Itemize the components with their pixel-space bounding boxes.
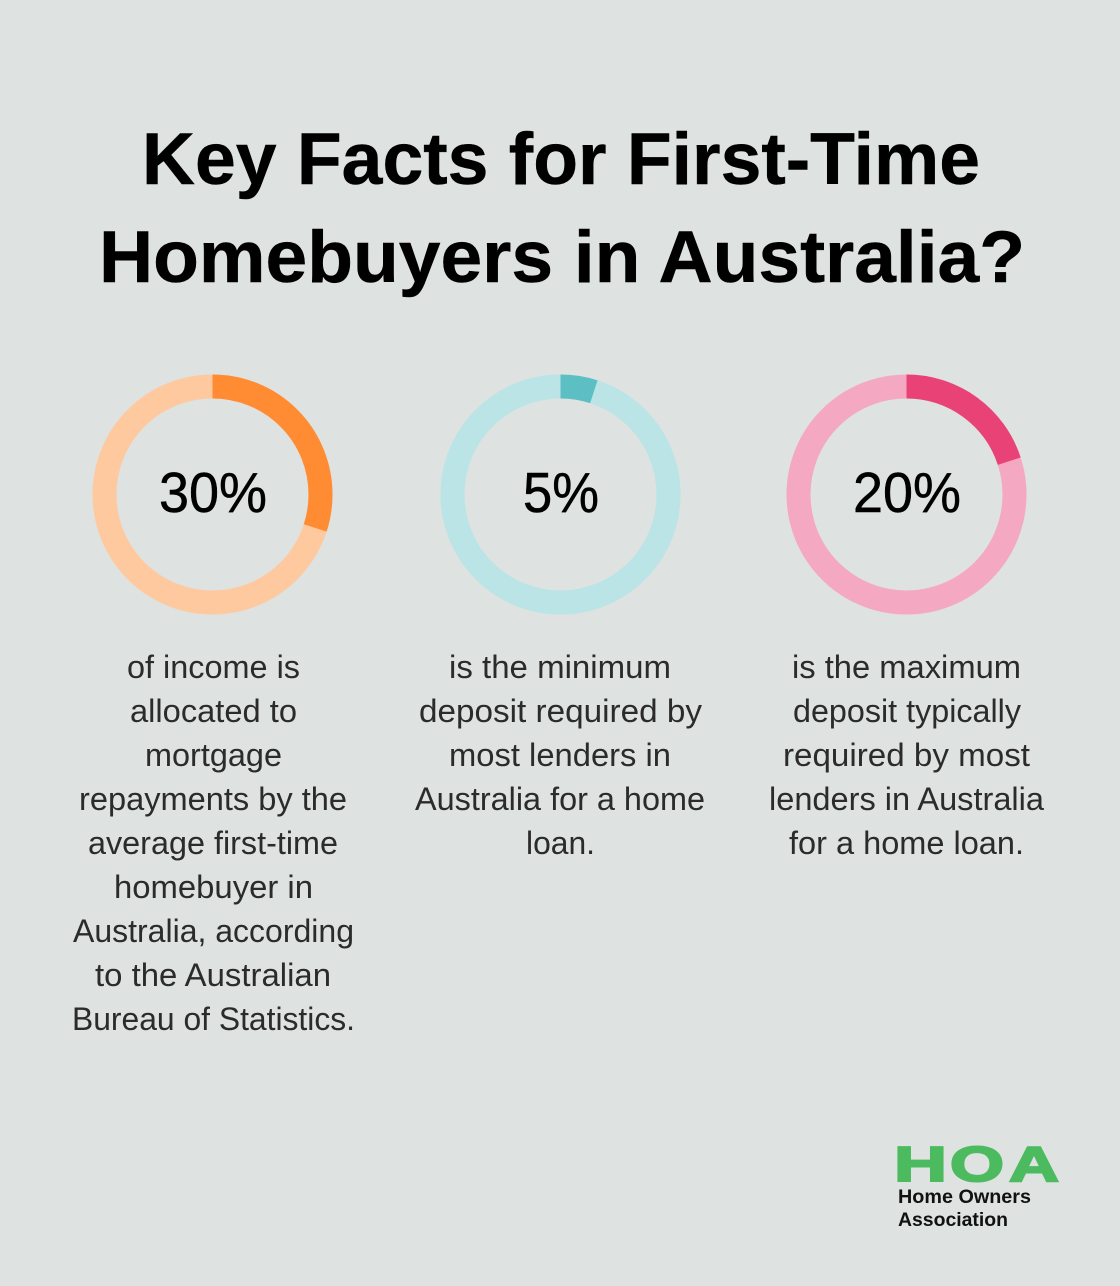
text: 5% description: Australia for a home [415, 781, 705, 817]
title: Homebuyers in Australia? [99, 217, 1025, 298]
text: 20% description: is the maximum [792, 649, 1021, 685]
title: Key Facts for First-Time [142, 119, 980, 200]
text: 5% description: loan. [526, 825, 595, 861]
text: 20% description [769, 649, 1044, 861]
number: 20%: 20% [853, 461, 961, 525]
donut chart: 20% [798, 386, 1014, 602]
text: 30% description: Australia, according [73, 913, 354, 949]
donut chart: 5% [452, 386, 668, 602]
panel: 20% stat [769, 386, 1044, 861]
text: 30% description: to the Australian [95, 957, 331, 993]
text: 30% description: repayments by the [79, 781, 347, 817]
title [99, 119, 1025, 298]
donut chart: 30% [104, 386, 320, 602]
logo: Home Owners Association: Association [898, 1209, 1008, 1231]
text: 5% description: most lenders in [449, 737, 671, 773]
text: 30% description: homebuyer in [114, 869, 313, 905]
text: 30% description: of income is [127, 649, 300, 685]
text: 30% description [72, 649, 355, 1037]
text: 5% description [415, 649, 705, 861]
logo: Home Owners Association: Home Owners [898, 1186, 1031, 1208]
logo: Home Owners Association: A [1009, 1138, 1059, 1192]
text: 5% description: deposit required by [419, 693, 702, 729]
logo: Home Owners Association: H [894, 1138, 947, 1192]
text: 30% description: average first-time [88, 825, 338, 861]
text: 20% description: lenders in Australia [769, 781, 1044, 817]
logo: Home Owners Association [894, 1138, 1059, 1231]
text: 30% description: allocated to [130, 693, 297, 729]
logo: Home Owners Association: O [950, 1138, 1004, 1192]
text: 30% description: mortgage [145, 737, 282, 773]
number: 5%: 5% [523, 461, 599, 525]
text: 5% description: is the minimum [449, 649, 671, 685]
number: 30%: 30% [159, 461, 267, 525]
panel: 5% stat [415, 386, 705, 861]
text: 20% description: deposit typically [793, 693, 1021, 729]
panel: 30% stat [72, 386, 355, 1037]
text: 20% description: required by most [783, 737, 1030, 773]
text: 30% description: Bureau of Statistics. [72, 1001, 355, 1037]
text: 20% description: for a home loan. [789, 825, 1024, 861]
